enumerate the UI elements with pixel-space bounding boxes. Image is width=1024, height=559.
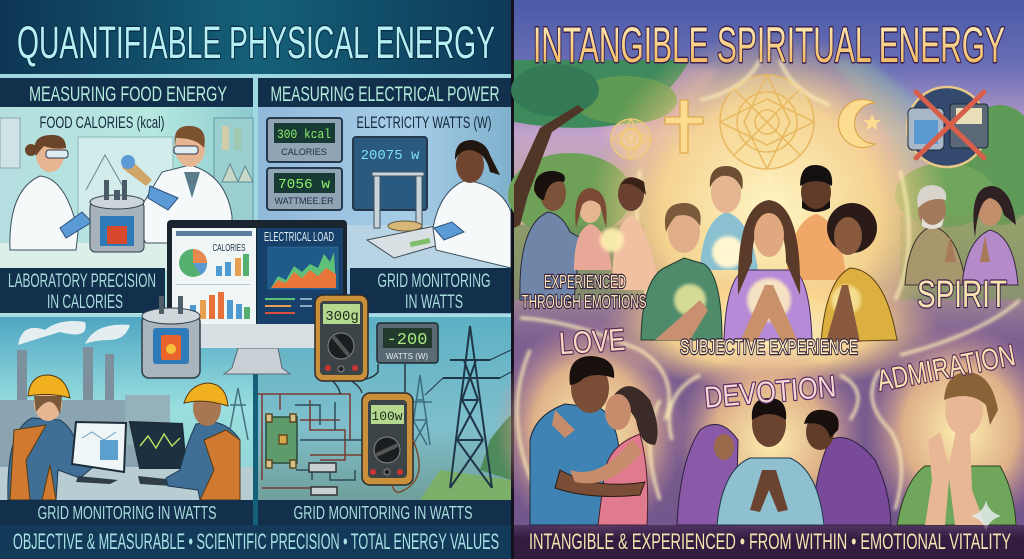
trees bbox=[508, 60, 1024, 300]
group: admiring young man bbox=[897, 372, 1016, 525]
icon: central mandala bbox=[720, 75, 814, 169]
display: watts reading bbox=[353, 137, 427, 210]
display: wattmeter reading: 7056 w bbox=[278, 177, 331, 193]
chart: electrical load area chart bbox=[265, 247, 338, 314]
caption: objective and measurable bbox=[0, 525, 511, 559]
icon: monitors bbox=[72, 422, 186, 486]
icon: scientist woman at scale bbox=[433, 140, 511, 268]
heading: measuring food energy: MEASURING FOOD ENERGY bbox=[29, 83, 227, 106]
icon: precision scale bbox=[367, 172, 456, 258]
display: calories reading: 300 kcal bbox=[277, 127, 331, 142]
group: people on left bbox=[520, 171, 660, 300]
bar: grid monitoring captions bbox=[0, 500, 511, 525]
group: embracing couple bbox=[530, 356, 658, 525]
icon: worker on right bbox=[166, 383, 240, 500]
panel: measuring electrical power bbox=[258, 78, 511, 314]
icon: central computer monitor bbox=[167, 220, 347, 374]
icon: crossed out measuring devices bbox=[907, 87, 988, 167]
label: calories: CALORIES bbox=[212, 243, 246, 254]
caption: objective and measurable: OBJECTIVE & MEASURABLE • SCIENTIFIC PRECISION • TOTAL ENERGY VALUES bbox=[13, 529, 499, 554]
icon: worker with orange vest bbox=[8, 375, 92, 500]
label: devotion: DEVOTION bbox=[703, 370, 837, 415]
icon: lower multimeter bbox=[362, 393, 419, 492]
group: praying trio bbox=[677, 398, 891, 525]
display: wattmeter reading bbox=[267, 168, 342, 210]
display: wattmeter reading: WATTMEE.ER bbox=[274, 196, 334, 206]
icon: scientist woman bbox=[10, 135, 92, 250]
icon: scientist man bbox=[121, 126, 232, 243]
caption: laboratory precision in calories: IN CALORIES bbox=[47, 292, 123, 313]
display: watts panel: WATTS (W) bbox=[386, 352, 428, 361]
label: experienced through emotions: EXPERIENCED bbox=[544, 272, 626, 292]
display: calories reading: CALORIES bbox=[281, 147, 327, 157]
icon: calorimeter in foreground bbox=[142, 296, 200, 378]
caption: left grid monitoring: GRID MONITORING IN WATTS bbox=[38, 503, 216, 523]
icon: small background tower bbox=[228, 388, 248, 440]
panel: quantifiable physical energy bbox=[0, 0, 511, 559]
group: people on right bbox=[905, 185, 1018, 285]
icon: small tower bbox=[408, 375, 432, 445]
icon: sparkle star bbox=[971, 500, 1001, 532]
icon: calorimeter bbox=[90, 180, 144, 252]
label: subjective experience: SUBJECTIVE EXPERIENCE bbox=[680, 336, 858, 359]
icon: circuit board bbox=[258, 394, 362, 495]
icon: cross bbox=[665, 100, 703, 153]
panel: grid monitoring circuit bbox=[258, 317, 511, 500]
display: watts panel: -200 bbox=[387, 331, 427, 350]
display: calories reading bbox=[267, 118, 342, 162]
icon: crescent and star bbox=[839, 100, 881, 148]
caption: grid monitoring in watts: GRID MONITORING bbox=[378, 271, 490, 292]
label: food calories: FOOD CALORIES (kcal) bbox=[40, 113, 164, 132]
label: experienced through emotions: THROUGH EMOTIONS bbox=[522, 292, 646, 312]
label: electricity watts: ELECTRICITY WATTS (W) bbox=[356, 113, 492, 132]
panel: measuring food energy bbox=[0, 78, 253, 314]
heading: measuring electrical power: MEASURING ELECTRICAL POWER bbox=[270, 83, 500, 106]
icon: transmission tower bbox=[425, 326, 511, 488]
background for lower section bbox=[495, 270, 1024, 540]
display: watts reading: 20075 w bbox=[361, 148, 420, 164]
icon: lower multimeter: 100w bbox=[371, 409, 403, 424]
caption: grid monitoring in watts: IN WATTS bbox=[405, 292, 463, 313]
caption: laboratory precision in calories: LABORATORY PRECISION bbox=[8, 271, 156, 292]
group: back row people bbox=[700, 165, 846, 280]
label: love: LOVE bbox=[558, 322, 626, 361]
icon: large multimeter bbox=[315, 295, 368, 381]
icon: large multimeter: 300g bbox=[325, 309, 359, 325]
title: quantifiable physical energy: QUANTIFIABLE PHYSICAL ENERGY bbox=[17, 17, 495, 68]
panel: grid monitoring workers bbox=[0, 317, 253, 500]
caption: right grid monitoring: GRID MONITORING IN WATTS bbox=[294, 503, 472, 523]
display: watts panel bbox=[377, 323, 438, 363]
divider bbox=[511, 0, 514, 559]
label: electrical load: ELECTRICAL LOAD bbox=[264, 229, 334, 244]
icon: mandala left bbox=[611, 119, 651, 159]
flowing golden lines bbox=[517, 60, 1019, 510]
chart: small bars bbox=[176, 254, 250, 319]
panel: intangible spiritual energy bbox=[495, 0, 1024, 559]
chart: pie chart bbox=[179, 249, 207, 277]
group: central praying people bbox=[641, 200, 897, 342]
